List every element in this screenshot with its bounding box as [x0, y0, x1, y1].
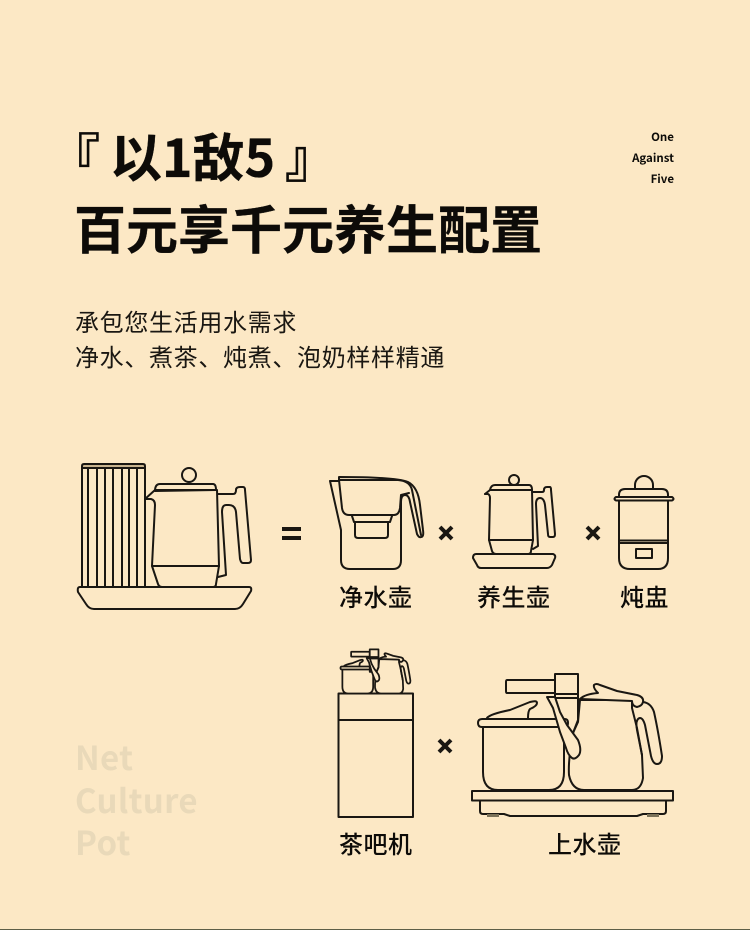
bottom edge line — [0, 929, 750, 930]
watermark: Net Culture Pot: Net — [75, 732, 133, 780]
icon: tabletop water kettle set — [472, 674, 673, 817]
tray — [78, 587, 251, 609]
label: health kettle: 养生壶 — [477, 578, 550, 613]
multiply sign 3 — [439, 740, 451, 752]
subtitle text — [75, 303, 445, 373]
label: tea bar machine: 茶吧机 — [339, 825, 412, 860]
subtitle text: 承包您生活用水需求 — [75, 303, 297, 338]
multiply sign 2 — [587, 527, 599, 539]
kettle with lid and handle — [145, 468, 251, 587]
multiply sign 1 — [440, 527, 452, 539]
watermark: Net Culture Pot: Pot — [75, 817, 131, 865]
icon: health kettle — [473, 475, 555, 568]
label: water filter jug: 净水壶 — [339, 578, 412, 613]
title line 2: 百元享千元养生配置 — [74, 189, 542, 264]
watermark: Net Culture Pot — [75, 732, 198, 865]
side note: One Against Five — [632, 129, 674, 187]
icon: water filter jug — [330, 477, 423, 569]
watermark: Net Culture Pot: Culture — [75, 775, 198, 823]
ribbed filter column — [82, 464, 145, 587]
icon: tea bar machine — [338, 649, 413, 817]
side note: One Against Five: Against — [632, 150, 674, 166]
side note: One Against Five: Five — [651, 171, 674, 187]
label: tabletop water kettle: 上水壶 — [548, 825, 622, 860]
small kettle set on machine — [340, 649, 410, 694]
subtitle text: 净水、煮茶、炖煮、泡奶样样精通 — [75, 338, 445, 373]
side note: One Against Five: One — [651, 129, 674, 145]
icon: stew pot — [614, 476, 674, 569]
title line 1: 『 以1敌5 』 — [48, 117, 337, 192]
equals sign — [282, 527, 301, 540]
label: stew pot: 炖盅 — [620, 578, 669, 613]
